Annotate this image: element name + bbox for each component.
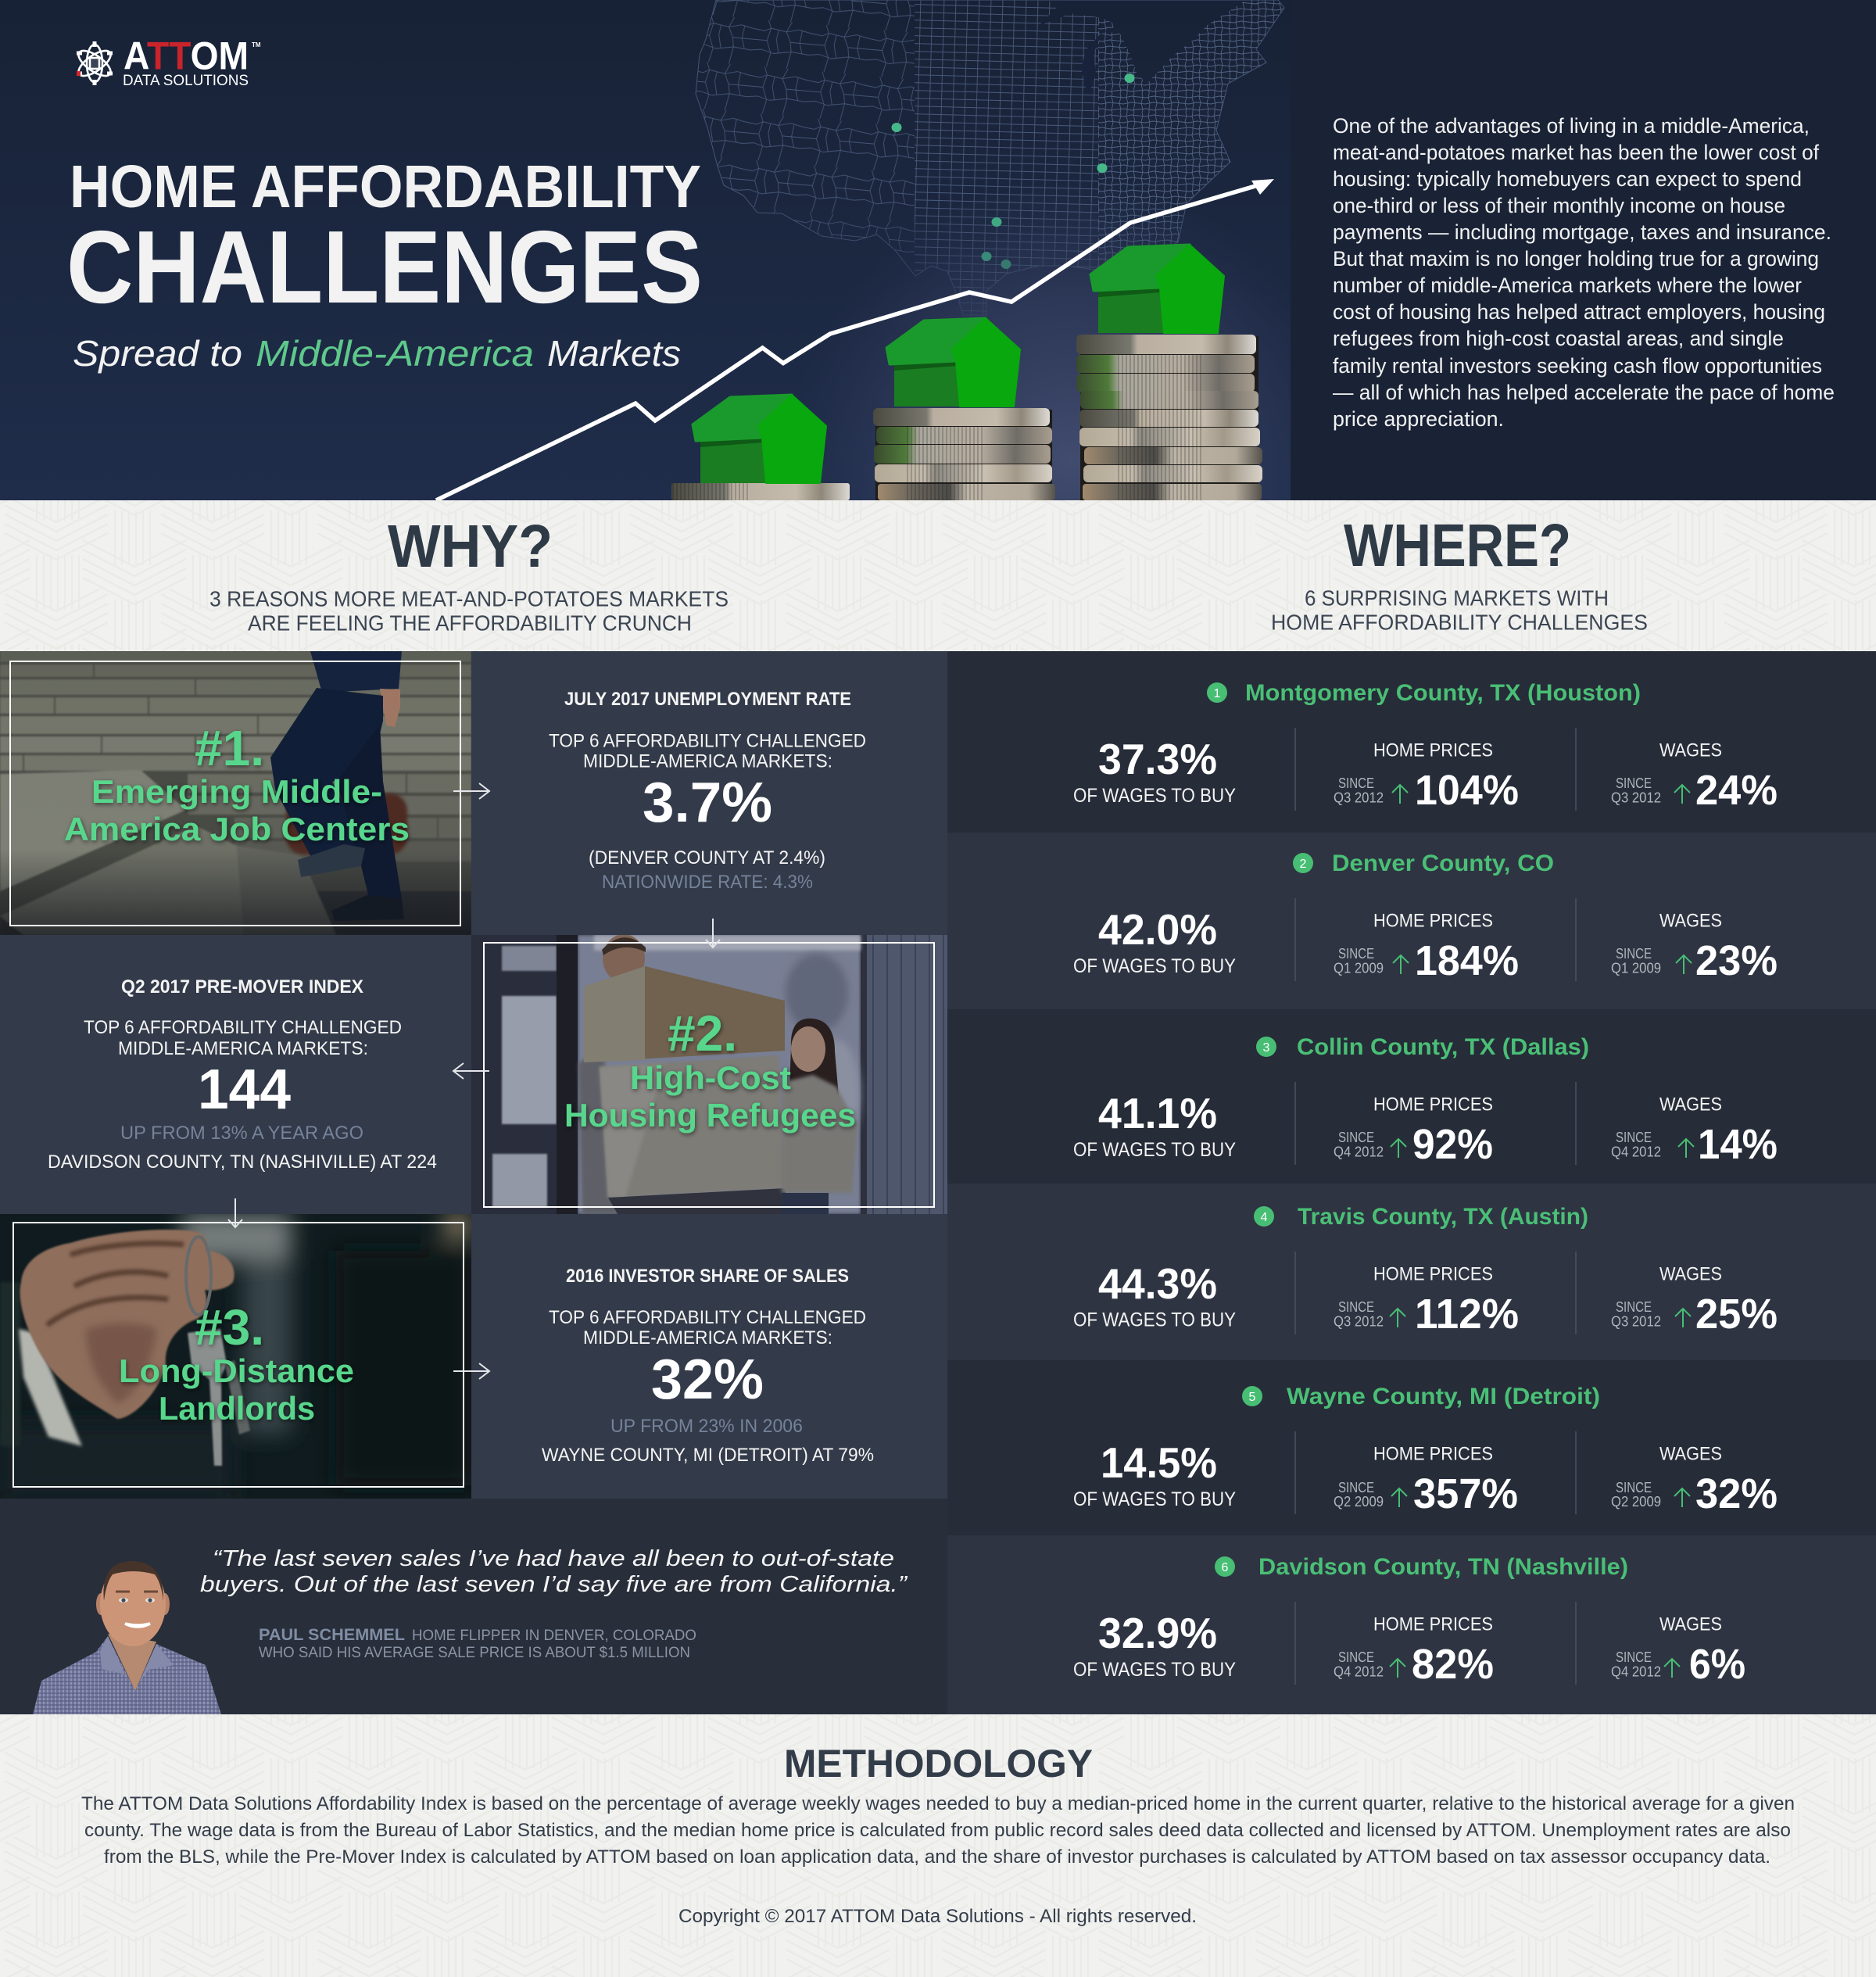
stat: share of wages: 37.3% — [1098, 735, 1217, 783]
panel: unemployment rate: JULY 2017 UNEMPLOYMENT RATE — [564, 689, 851, 710]
stat: share of wages: 42.0% — [1098, 905, 1217, 954]
logo: ATTOM Data Solutions: DATA SOLUTIONS — [123, 72, 249, 89]
rank badge 4 — [1254, 1206, 1274, 1227]
copyright: Copyright © 2017 ATTOM Data Solutions - All rights reserved. — [678, 1906, 1197, 1927]
heading: reason 1 — [64, 720, 410, 847]
heading: methodology: METHODOLOGY — [784, 1742, 1093, 1785]
county name: Wayne County, MI (Detroit) — [1287, 1384, 1600, 1409]
section band: why and where headings — [0, 500, 1876, 651]
icon: ATTOM emblem — [75, 41, 114, 85]
rank badge 3 — [1256, 1037, 1276, 1057]
stat: share of wages: OF WAGES TO BUY — [1073, 1139, 1236, 1161]
quote text: buyers. Out of the last seven I’d say five are from California.” — [200, 1572, 908, 1597]
intro paragraph: price appreciation. — [1333, 407, 1504, 431]
home prices — [1334, 1263, 1519, 1338]
home prices: SINCE — [1338, 1649, 1374, 1665]
quote text — [200, 1546, 908, 1597]
methodology text: from the BLS, while the Pre-Mover Index is calculated by ATTOM based on loan application data, and the share of investor purchases is calculated by ATTOM based on tax assessor occupancy data. — [104, 1846, 1770, 1868]
market row 4: Travis County — [947, 1184, 1876, 1360]
quote text: “The last seven sales I’ve had have all been to out-of-state — [213, 1546, 894, 1571]
stat: share of wages — [1073, 905, 1236, 977]
wages: WAGES — [1659, 910, 1722, 932]
stat: share of wages: OF WAGES TO BUY — [1073, 1488, 1236, 1510]
market row 6: Davidson County — [947, 1535, 1876, 1714]
wages — [1611, 740, 1778, 814]
wages: 25% — [1695, 1291, 1778, 1338]
home prices: HOME PRICES — [1373, 1443, 1493, 1465]
map: US county map with market dots — [688, 0, 1298, 321]
wages: 32% — [1695, 1470, 1778, 1517]
coin stack 2 — [873, 408, 1055, 500]
county name: Collin County, TX (Dallas) — [1297, 1034, 1589, 1060]
quote attribution: WHO SAID HIS AVERAGE SALE PRICE IS ABOUT $1.5 MILLION — [259, 1645, 690, 1661]
wages: Q4 2012 — [1611, 1664, 1661, 1679]
panel: investor share of sales — [471, 1214, 947, 1499]
heading: why: ARE FEELING THE AFFORDABILITY CRUNCH — [248, 611, 692, 635]
home prices — [1334, 910, 1519, 984]
heading: why — [209, 513, 729, 635]
rank badge 2: 2 — [1300, 858, 1307, 871]
home prices: SINCE — [1338, 1299, 1374, 1315]
heading: why: WHY? — [388, 513, 553, 580]
header background — [0, 181, 1291, 500]
intro paragraph: payments — including mortgage, taxes and insurance. — [1333, 220, 1831, 244]
logo: ATTOM Data Solutions: TM — [252, 41, 261, 48]
stat: share of wages: 41.1% — [1098, 1089, 1217, 1137]
intro paragraph: — all of which has helped accelerate the pace of home — [1333, 381, 1835, 404]
panel: investor share of sales: TOP 6 AFFORDABILITY CHALLENGED — [549, 1307, 866, 1328]
logo: ATTOM Data Solutions — [75, 34, 261, 89]
arrow: pre-mover index to reason 3 — [228, 1198, 242, 1227]
home prices: HOME PRICES — [1373, 1094, 1493, 1115]
heading: reason 2: High-Cost — [630, 1059, 791, 1096]
home prices: 112% — [1415, 1291, 1519, 1338]
home prices: Q4 2012 — [1334, 1664, 1384, 1679]
home prices — [1334, 740, 1519, 814]
subtitle — [73, 333, 681, 374]
heading: where — [1271, 512, 1648, 635]
rank badge 3: 3 — [1263, 1041, 1270, 1055]
title: HOME AFFORDABILITY — [70, 153, 701, 220]
home prices: Q3 2012 — [1334, 790, 1384, 805]
rank badge 1: 1 — [1214, 687, 1221, 700]
panel: unemployment rate: (DENVER COUNTY AT 2.4%) — [589, 847, 825, 869]
arrow: rising price trend line — [436, 179, 1274, 500]
stat: 3.7 percent: 3.7% — [643, 772, 772, 834]
home prices: HOME PRICES — [1373, 740, 1493, 761]
subtitle: Middle-America — [256, 333, 534, 374]
panel: reason 1 photo, emerging job centers — [0, 651, 471, 935]
wages: Q2 2009 — [1611, 1494, 1661, 1510]
quote attribution: PAUL SCHEMMEL — [259, 1626, 405, 1644]
wages — [1611, 1613, 1745, 1688]
photo: woman — [782, 1019, 857, 1214]
arrow: reason 2 to pre-mover index — [453, 1063, 489, 1079]
panel: methodology — [0, 1714, 1876, 1977]
stat: share of wages — [1073, 1089, 1236, 1161]
home prices — [1334, 1094, 1493, 1168]
panel: investor share of sales: MIDDLE-AMERICA MARKETS: — [583, 1327, 832, 1348]
home prices: 104% — [1415, 767, 1519, 814]
home prices: SINCE — [1338, 1480, 1374, 1495]
intro paragraph: housing: typically homebuyers can expect to spend — [1333, 167, 1802, 191]
intro paragraph: One of the advantages of living in a middle-America, — [1333, 114, 1810, 138]
wages: WAGES — [1659, 1094, 1722, 1115]
wages: Q1 2009 — [1611, 960, 1661, 976]
intro paragraph: cost of housing has helped attract employers, housing — [1333, 300, 1825, 324]
panel: investor share of sales: WAYNE COUNTY, MI (DETROIT) AT 79% — [542, 1445, 874, 1466]
coin stack 3 — [1076, 335, 1262, 500]
home prices: Q1 2009 — [1334, 960, 1384, 976]
heading: reason 2 — [564, 1005, 856, 1134]
county name: Montgomery County, TX (Houston) — [1245, 680, 1641, 706]
photo: stone stairs — [0, 651, 471, 935]
stat: 32 percent: 32% — [651, 1348, 764, 1411]
rank badge 1 — [1207, 682, 1227, 703]
heading: where: WHERE? — [1344, 512, 1571, 579]
home prices — [1334, 1443, 1518, 1517]
home prices: HOME PRICES — [1373, 1263, 1493, 1285]
panel: pre-mover index: UP FROM 13% A YEAR AGO — [120, 1123, 363, 1144]
intro paragraph: refugees from high-cost coastal areas, and single — [1333, 327, 1784, 350]
stat: share of wages — [1073, 1609, 1236, 1681]
wages: WAGES — [1659, 740, 1722, 761]
panel: pre-mover index: Q2 2017 PRE-MOVER INDEX — [121, 976, 363, 997]
home prices: HOME PRICES — [1373, 1613, 1493, 1635]
panel: reason 3 photo, long-distance landlords — [0, 1214, 471, 1499]
wages: WAGES — [1659, 1263, 1722, 1285]
coin stack 1 — [671, 483, 850, 500]
panel: unemployment rate — [471, 651, 947, 935]
stat: share of wages — [1073, 1259, 1236, 1331]
house 1 — [693, 395, 826, 483]
arrow: reason 3 to investor share — [453, 1363, 489, 1379]
wages: 24% — [1695, 767, 1778, 814]
heading: reason 1: America Job Centers — [64, 811, 410, 847]
panel: pre-mover index — [0, 935, 471, 1214]
county name: Denver County, CO — [1332, 851, 1554, 876]
stat: share of wages: 32.9% — [1098, 1609, 1217, 1657]
wages — [1611, 910, 1778, 984]
wages — [1611, 1094, 1778, 1168]
heading: reason 2: #2. — [668, 1005, 737, 1062]
wages: 23% — [1695, 937, 1778, 984]
arrow: unemployment to reason 2 — [706, 919, 720, 947]
photo: climbing man — [270, 651, 407, 921]
rank badge 6: 6 — [1222, 1561, 1229, 1574]
rank badge 5: 5 — [1249, 1391, 1256, 1404]
home prices: Q2 2009 — [1334, 1494, 1384, 1510]
illustration: green houses on coin stacks — [671, 245, 1262, 500]
intro paragraph: meat-and-potatoes market has been the lower cost of — [1333, 141, 1819, 164]
home prices: 82% — [1412, 1641, 1494, 1688]
wages: Q3 2012 — [1611, 790, 1661, 805]
panel: unemployment rate: TOP 6 AFFORDABILITY CHALLENGED — [549, 730, 866, 752]
market row 3: Collin County — [947, 1009, 1876, 1184]
panel: unemployment rate: NATIONWIDE RATE: 4.3% — [602, 872, 813, 893]
quote attribution — [259, 1626, 696, 1661]
panel: pre-mover index: MIDDLE-AMERICA MARKETS: — [118, 1038, 368, 1059]
home prices: Q4 2012 — [1334, 1144, 1384, 1160]
county name: Davidson County, TN (Nashville) — [1258, 1554, 1628, 1580]
wages: SINCE — [1616, 1649, 1652, 1665]
wages: 14% — [1698, 1121, 1778, 1168]
wages: SINCE — [1616, 775, 1652, 791]
heading: reason 1: #1. — [195, 720, 264, 776]
home prices: HOME PRICES — [1373, 910, 1493, 932]
stat: share of wages: OF WAGES TO BUY — [1073, 1309, 1236, 1331]
intro paragraph — [1333, 114, 1835, 431]
wages — [1611, 1443, 1778, 1517]
stat: share of wages — [1073, 735, 1236, 807]
heading: reason 2: Housing Refugees — [564, 1097, 856, 1134]
house 2 — [886, 318, 1020, 407]
heading: where: 6 SURPRISING MARKETS WITH — [1305, 586, 1609, 610]
title: CHALLENGES — [66, 210, 703, 324]
home prices: 92% — [1412, 1121, 1493, 1168]
rank badge 4: 4 — [1261, 1211, 1268, 1224]
intro paragraph: family rental investors seeking cash flow opportunities — [1333, 354, 1822, 378]
intro paragraph: number of middle-America markets where the lower — [1333, 274, 1802, 297]
heading: reason 1: Emerging Middle- — [91, 773, 382, 810]
heading: reason 3 — [119, 1299, 354, 1427]
map dots: six markets — [891, 73, 1135, 269]
subtitle: Markets — [547, 333, 681, 374]
wages — [1611, 1263, 1778, 1338]
wages: SINCE — [1616, 946, 1652, 962]
home prices: SINCE — [1338, 775, 1374, 791]
stat: share of wages: OF WAGES TO BUY — [1073, 955, 1236, 977]
photo: porch background — [471, 935, 947, 1214]
heading: reason 3: Long-Distance — [119, 1352, 354, 1389]
home prices: 357% — [1413, 1470, 1518, 1517]
home prices: SINCE — [1338, 946, 1374, 962]
wages: SINCE — [1616, 1480, 1652, 1495]
subtitle: Spread to — [73, 333, 242, 374]
logo: ATTOM Data Solutions: ATTOM — [124, 34, 249, 78]
methodology text — [81, 1793, 1795, 1868]
panel: quote — [0, 1499, 947, 1714]
wages: WAGES — [1659, 1613, 1722, 1635]
stat: share of wages: OF WAGES TO BUY — [1073, 785, 1236, 807]
home prices — [1334, 1613, 1494, 1688]
home prices: 184% — [1415, 937, 1519, 984]
intro paragraph: But that maxim is no longer holding true for a growing — [1333, 247, 1819, 270]
rank badge 2 — [1293, 853, 1313, 873]
heading: reason 3: #3. — [195, 1299, 264, 1356]
panel: investor share of sales: 2016 INVESTOR SHARE OF SALES — [566, 1266, 849, 1287]
wages: 6% — [1689, 1641, 1745, 1688]
county name: Travis County, TX (Austin) — [1298, 1204, 1588, 1230]
heading: why: 3 REASONS MORE MEAT-AND-POTATOES MARKETS — [209, 586, 729, 611]
wages: Q3 2012 — [1611, 1313, 1661, 1329]
wages: WAGES — [1659, 1443, 1722, 1465]
panel: pre-mover index: DAVIDSON COUNTY, TN (NASHIVILLE) AT 224 — [48, 1151, 437, 1173]
title — [66, 153, 703, 324]
heading: where: HOME AFFORDABILITY CHALLENGES — [1271, 610, 1648, 635]
wages: SINCE — [1616, 1299, 1652, 1315]
photo: man and boxes — [578, 934, 789, 1214]
stat: share of wages — [1073, 1438, 1236, 1510]
market row 1: Montgomery County — [947, 651, 1876, 833]
photo: hand holding keys — [0, 1230, 250, 1466]
panel: reason 2 photo, housing refugees — [471, 934, 947, 1214]
wages: SINCE — [1616, 1130, 1652, 1145]
stat: share of wages: 44.3% — [1098, 1259, 1217, 1308]
panel: unemployment rate: MIDDLE-AMERICA MARKETS: — [583, 750, 832, 772]
methodology text: county. The wage data is from the Bureau of Labor Statistics, and the median home price is calculated from public record sales deed data collected and licensed by ATTOM. Unemployment rates are also — [84, 1820, 1791, 1841]
market row 5: Wayne County — [947, 1360, 1876, 1535]
house 3 — [1090, 245, 1224, 333]
intro paragraph: one-third or less of their monthly income on house — [1333, 194, 1785, 217]
stat: share of wages: 14.5% — [1101, 1438, 1217, 1487]
methodology text: The ATTOM Data Solutions Affordability Index is based on the percentage of average weekly wages needed to buy a median-priced home in the current quarter, relative to the historical average for a given — [81, 1793, 1795, 1814]
stat: 144: 144 — [198, 1058, 291, 1121]
rank badge 5 — [1242, 1386, 1262, 1406]
photo: Paul Schemmel portrait — [33, 1561, 221, 1714]
heading: reason 3: Landlords — [159, 1390, 315, 1427]
panel: investor share of sales: UP FROM 23% IN 2006 — [610, 1416, 803, 1437]
panel: pre-mover index: TOP 6 AFFORDABILITY CHALLENGED — [84, 1017, 402, 1038]
stat: share of wages: OF WAGES TO BUY — [1073, 1659, 1236, 1681]
home prices: Q3 2012 — [1334, 1313, 1384, 1329]
home prices: SINCE — [1338, 1130, 1374, 1145]
arrow: reason 1 to unemployment — [453, 783, 489, 799]
market row 2: Denver County — [947, 833, 1876, 1009]
quote attribution: HOME FLIPPER IN DENVER, COLORADO — [412, 1628, 696, 1644]
wages: Q4 2012 — [1611, 1144, 1661, 1160]
rank badge 6 — [1215, 1556, 1235, 1577]
